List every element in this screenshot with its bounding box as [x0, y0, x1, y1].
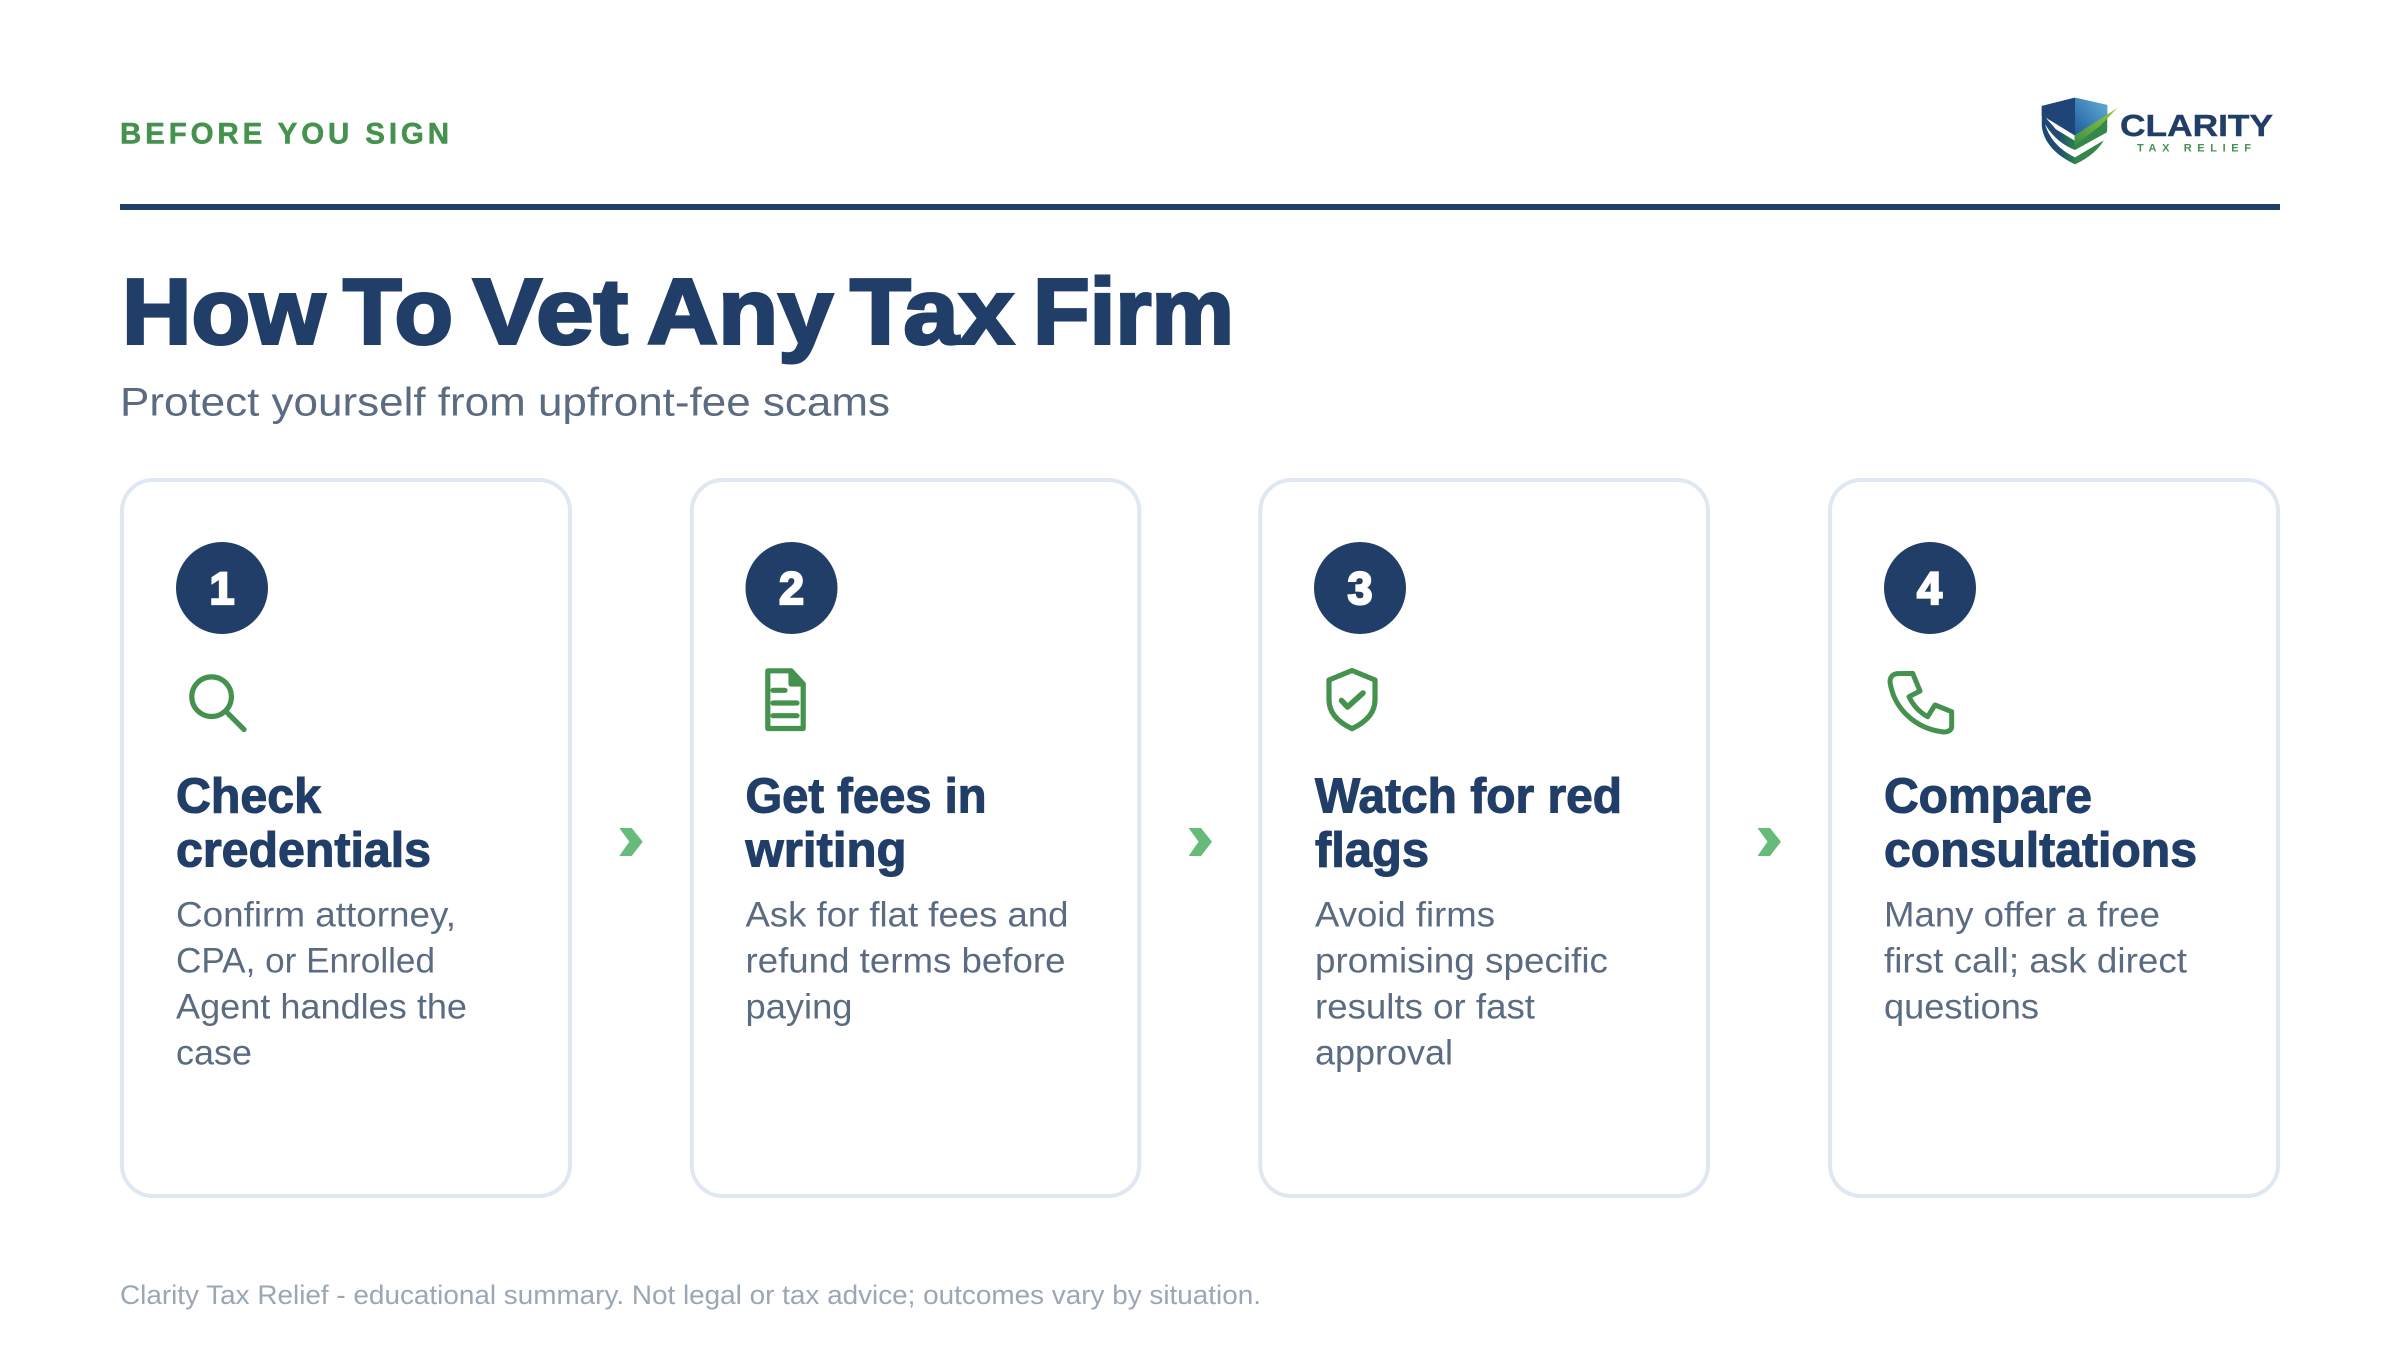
arrow 2 [1189, 828, 1212, 856]
body text: approval [1315, 1032, 1453, 1072]
heading: watch for red flags: flags [1315, 823, 1429, 877]
body text [1884, 894, 2187, 1026]
subtitle: Protect yourself from upfront-fee scams [120, 380, 890, 424]
step number 3: 3 [1347, 563, 1373, 614]
title: How [122, 260, 326, 364]
heading: compare consultations: Compare [1884, 770, 2092, 824]
icon: document [768, 671, 803, 728]
heading: get fees in writing: Get fees in [746, 770, 986, 824]
arrow 3 [1758, 828, 1781, 856]
title: To [343, 260, 453, 364]
body text: paying [746, 986, 852, 1026]
heading: get fees in writing [744, 770, 986, 877]
eyebrow label: BEFORE YOU SIGN [120, 118, 449, 151]
heading: compare consultations: consultations [1884, 823, 2197, 877]
heading: get fees in writing: writing [744, 823, 906, 877]
body text: refund terms before [746, 940, 1066, 980]
logo: Clarity Tax Relief [2040, 97, 2273, 167]
heading: check credentials: credentials [176, 823, 431, 877]
title: Any [647, 260, 833, 364]
panel: step 1 check credentials [122, 480, 570, 1196]
body text [746, 894, 1068, 1026]
heading: watch for red flags: Watch for red [1315, 770, 1622, 824]
heading: check credentials: Check [176, 770, 322, 824]
body text [176, 894, 467, 1072]
header rule [120, 204, 2280, 210]
body text: Ask for flat fees and [746, 894, 1068, 934]
step number 1 [176, 542, 268, 634]
title: Tax [850, 260, 1014, 364]
panel: step 2 get fees in writing [692, 480, 1139, 1196]
body text: results or fast [1315, 986, 1535, 1026]
step number 2: 2 [779, 563, 804, 614]
heading: compare consultations [1884, 770, 2197, 877]
title: Vet [473, 260, 628, 364]
heading: check credentials [176, 770, 431, 877]
icon: phone [1890, 673, 1952, 732]
step number 4 [1884, 542, 1976, 634]
body text: questions [1884, 986, 2039, 1026]
logo wordmark: CLARITY [2120, 108, 2273, 143]
step number 2 [746, 542, 838, 634]
body text: first call; ask direct [1884, 940, 2187, 980]
body text: case [176, 1032, 252, 1072]
body text: Confirm attorney, [176, 894, 456, 934]
panel: step 3 watch for red flags [1260, 480, 1708, 1196]
body text: CPA, or Enrolled [176, 940, 435, 980]
body text: Many offer a free [1884, 894, 2160, 934]
panel: step 4 compare consultations [1830, 480, 2278, 1196]
icon: shield check [1329, 670, 1375, 729]
icon: magnifying glass [192, 677, 244, 730]
step number 4: 4 [1917, 563, 1942, 614]
body text: Agent handles the [176, 986, 467, 1026]
body text [1315, 894, 1608, 1072]
step number 3 [1314, 542, 1406, 634]
body text: Avoid firms [1315, 894, 1495, 934]
footer disclaimer: Clarity Tax Relief - educational summary. Not legal or tax advice; outcomes vary by situation. [120, 1280, 1261, 1310]
icon: logo shield [2040, 97, 2117, 167]
logo tagline: TAX RELIEF [2137, 143, 2251, 155]
heading: watch for red flags [1315, 770, 1622, 877]
title: Firm [1033, 260, 1234, 364]
step number 1: 1 [209, 563, 235, 614]
arrow 1 [619, 828, 643, 856]
body text: promising specific [1315, 940, 1608, 980]
